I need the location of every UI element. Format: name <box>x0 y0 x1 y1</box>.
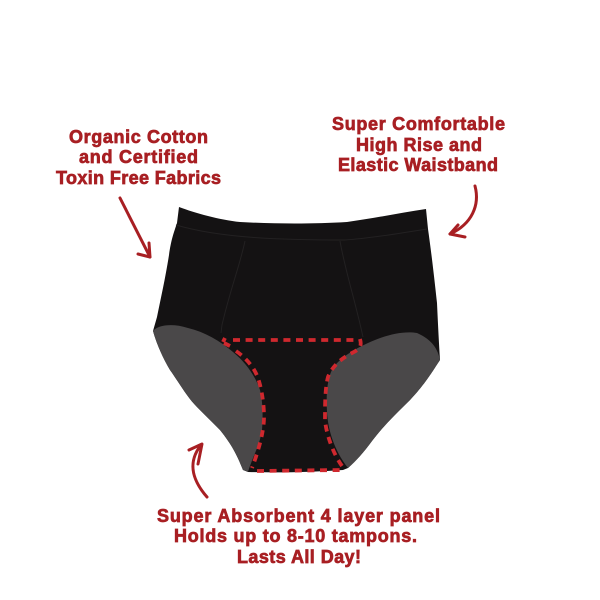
callout: absorbent panel: Holds up to 8-10 tampons. <box>174 526 417 546</box>
callout: absorbent panel: Super Absorbent 4 layer panel <box>157 506 440 526</box>
callout: organic cotton <box>56 127 221 188</box>
right grey lining <box>327 332 440 468</box>
callout: high rise waistband <box>332 114 505 175</box>
dashed panel outline <box>223 338 361 471</box>
product: black underwear <box>153 207 440 472</box>
arrow: waistband <box>450 186 476 237</box>
callout: absorbent panel: Lasts All Day! <box>237 547 361 567</box>
callout: organic cotton: Organic Cotton <box>69 127 208 147</box>
arrow: organic cotton <box>120 198 150 257</box>
callout: high rise waistband: Elastic Waistband <box>338 155 498 175</box>
waistband seam and front panel <box>176 225 427 337</box>
callout: high rise waistband: Super Comfortable <box>332 114 505 134</box>
callout: absorbent panel <box>157 506 440 567</box>
callout: high rise waistband: High Rise and <box>356 135 482 155</box>
callout: organic cotton: Toxin Free Fabrics <box>56 168 221 188</box>
left grey lining <box>153 325 263 472</box>
arrow: absorbent panel <box>189 444 207 497</box>
underwear body <box>153 207 440 472</box>
callout: organic cotton: and Certified <box>79 147 198 167</box>
